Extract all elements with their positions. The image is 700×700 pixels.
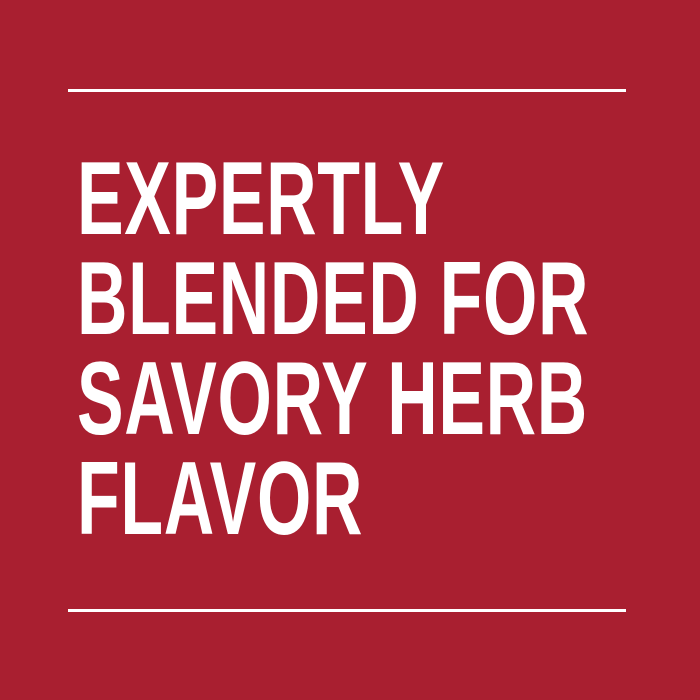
top rule — [68, 89, 626, 92]
bottom rule — [68, 609, 626, 612]
headline line 4: FLAVOR — [77, 441, 363, 557]
headline — [77, 141, 589, 557]
headline line 2: BLENDED FOR — [77, 241, 589, 357]
headline line 3: SAVORY HERB — [77, 341, 588, 457]
headline line 1: EXPERTLY — [77, 141, 445, 257]
